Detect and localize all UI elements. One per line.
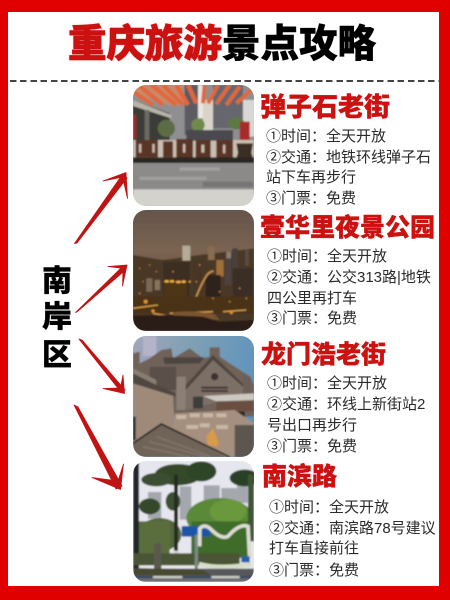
arrow to 龙门浩老街	[79, 339, 125, 394]
photo: 南滨路	[133, 461, 254, 582]
arrow to 壹华里夜景公园	[76, 265, 127, 312]
district label: 南	[42, 265, 72, 298]
details: 四公里再打车	[267, 290, 357, 307]
details	[267, 375, 425, 455]
district label	[42, 265, 72, 372]
panel: 南滨路	[262, 462, 436, 579]
district label: 岸	[42, 301, 72, 334]
details	[266, 128, 431, 207]
details: ①时间：全天开放	[267, 375, 387, 392]
details: ①时间：全天开放	[267, 248, 387, 265]
photo: 龙门浩老街	[133, 336, 254, 457]
arrow to 南滨路	[74, 405, 124, 490]
details: ③门票：免费	[269, 562, 359, 579]
district label: 区	[42, 339, 72, 372]
photo: 壹华里夜景公园	[133, 210, 254, 331]
details: ②交通：地铁环线弹子石	[266, 149, 431, 166]
details	[269, 499, 436, 579]
details: ②交通：公交313路|地铁	[267, 269, 431, 286]
details: ②交通：南滨路78号建议	[269, 520, 436, 537]
panel: 壹华里夜景公园	[260, 214, 435, 327]
details: ①时间：全天开放	[266, 128, 386, 145]
photo: 弹子石老街	[133, 85, 254, 206]
panel: 龙门浩老街	[261, 340, 425, 455]
details: ③门票：免费	[267, 438, 357, 455]
title: 重庆旅游景点攻略	[68, 23, 376, 66]
details: ③门票：免费	[267, 310, 357, 327]
details: ③门票：免费	[266, 190, 356, 207]
details: ①时间：全天开放	[269, 499, 389, 516]
heading: 龙门浩老街	[261, 341, 386, 369]
heading: 壹华里夜景公园	[260, 214, 435, 242]
details: 号出口再步行	[267, 417, 357, 434]
heading: 南滨路	[262, 463, 337, 491]
panel: 弹子石老街	[260, 92, 431, 207]
details: 打车直接前往	[269, 540, 359, 557]
arrow to 弹子石老街	[74, 172, 128, 244]
heading: 弹子石老街	[260, 92, 390, 122]
details: ②交通：环线上新街站2	[267, 396, 425, 413]
arrows from district to attractions	[74, 172, 128, 490]
details: 站下车再步行	[266, 169, 356, 186]
details	[267, 248, 431, 327]
